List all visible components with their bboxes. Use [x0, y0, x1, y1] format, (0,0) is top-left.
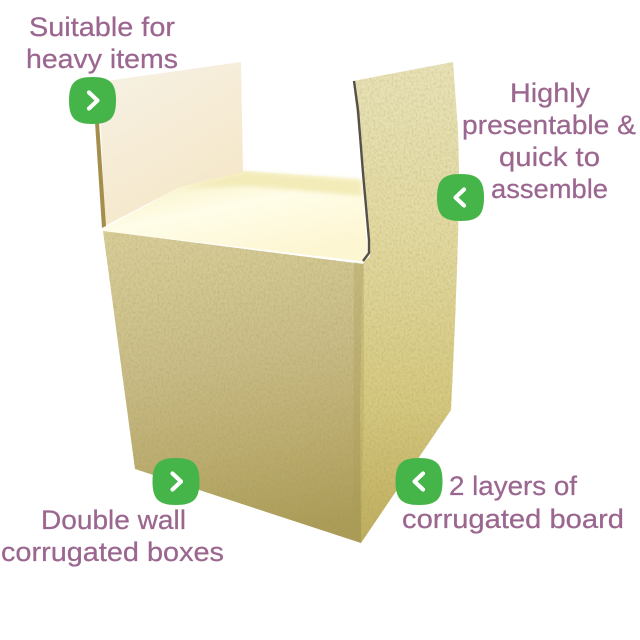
label text: Highly: [510, 78, 591, 108]
label text: presentable &: [462, 110, 636, 140]
label text: [462, 78, 636, 204]
label text: Suitable for: [29, 12, 175, 42]
icon: left chevron button: [396, 458, 442, 505]
label text: 2 layers of: [449, 471, 578, 501]
box interior: [103, 171, 368, 262]
label text: corrugated boxes: [1, 537, 224, 567]
label text: [26, 12, 178, 74]
label text: [1, 505, 224, 567]
right face and flap: [353, 62, 459, 543]
front face: [103, 231, 365, 543]
interior back fold shading: [182, 172, 362, 196]
left flap: [99, 62, 243, 226]
label text: [402, 471, 624, 534]
icon: right chevron button: [69, 77, 116, 124]
label text: corrugated board: [402, 504, 624, 534]
label text: assemble: [491, 174, 608, 204]
callout: highly presentable and quick to assemble: [437, 78, 636, 221]
label text: quick to: [499, 142, 600, 172]
callout: double wall corrugated boxes: [1, 458, 224, 567]
cardboard box photo: [95, 62, 459, 543]
front corner shadow: [353, 262, 364, 541]
icon: right chevron button: [152, 458, 200, 505]
label text: heavy items: [26, 44, 178, 74]
icon: left chevron button: [437, 174, 484, 221]
callout: suitable for heavy items: [26, 12, 178, 124]
label text: Double wall: [41, 505, 186, 535]
callout: 2 layers of corrugated board: [396, 458, 624, 534]
right flap dark edge: [354, 81, 369, 261]
left flap cut edge: [95, 122, 106, 228]
